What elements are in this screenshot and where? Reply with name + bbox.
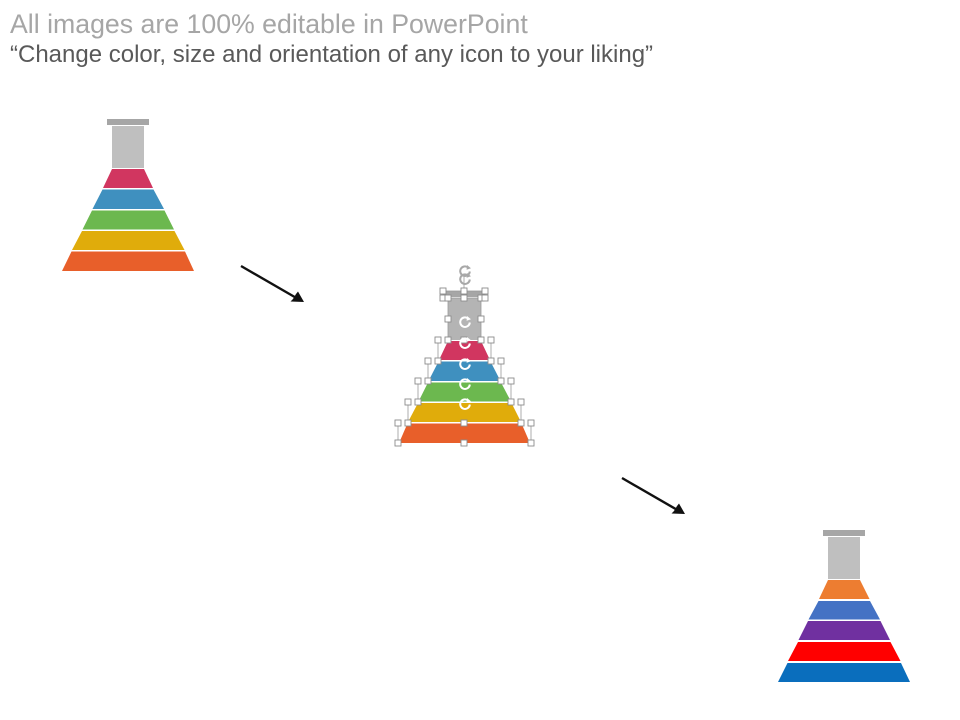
layer: yellow: [408, 403, 521, 422]
layer: blue: [92, 190, 164, 209]
layer: blue: [428, 362, 500, 381]
flask cap: [443, 291, 485, 297]
arrow: second to third flask: [622, 478, 685, 514]
layer: blue: [808, 601, 880, 620]
layer: orange: [819, 580, 870, 599]
flask: source colours, top left: [62, 119, 194, 271]
layer: yellow: [72, 231, 184, 250]
layer: purple: [798, 621, 890, 640]
layer: crimson: [103, 169, 153, 188]
flask neck: [828, 537, 860, 579]
layer: red: [788, 642, 900, 661]
layer: orange: [399, 424, 530, 443]
arrow: first to second flask: [241, 266, 304, 302]
rotation handles: [460, 265, 471, 409]
selection handles: [395, 288, 534, 446]
flask neck: [112, 126, 144, 168]
layer: crimson: [439, 341, 490, 360]
layer: green: [418, 382, 511, 402]
subtitle: “Change color, size and orientation of any icon to your liking”: [10, 41, 653, 68]
layer: green: [82, 210, 174, 230]
flask cap: [823, 530, 865, 536]
flask: recoloured, bottom right: [778, 530, 910, 682]
flask: selected with edit handles, centre: [395, 265, 534, 446]
selection outlines: [398, 276, 531, 443]
title: All images are 100% editable in PowerPoint: [10, 9, 528, 39]
layer: orange: [62, 252, 194, 271]
flask neck: [448, 298, 481, 340]
layer: dark blue: [778, 663, 910, 682]
flask cap: [107, 119, 149, 125]
